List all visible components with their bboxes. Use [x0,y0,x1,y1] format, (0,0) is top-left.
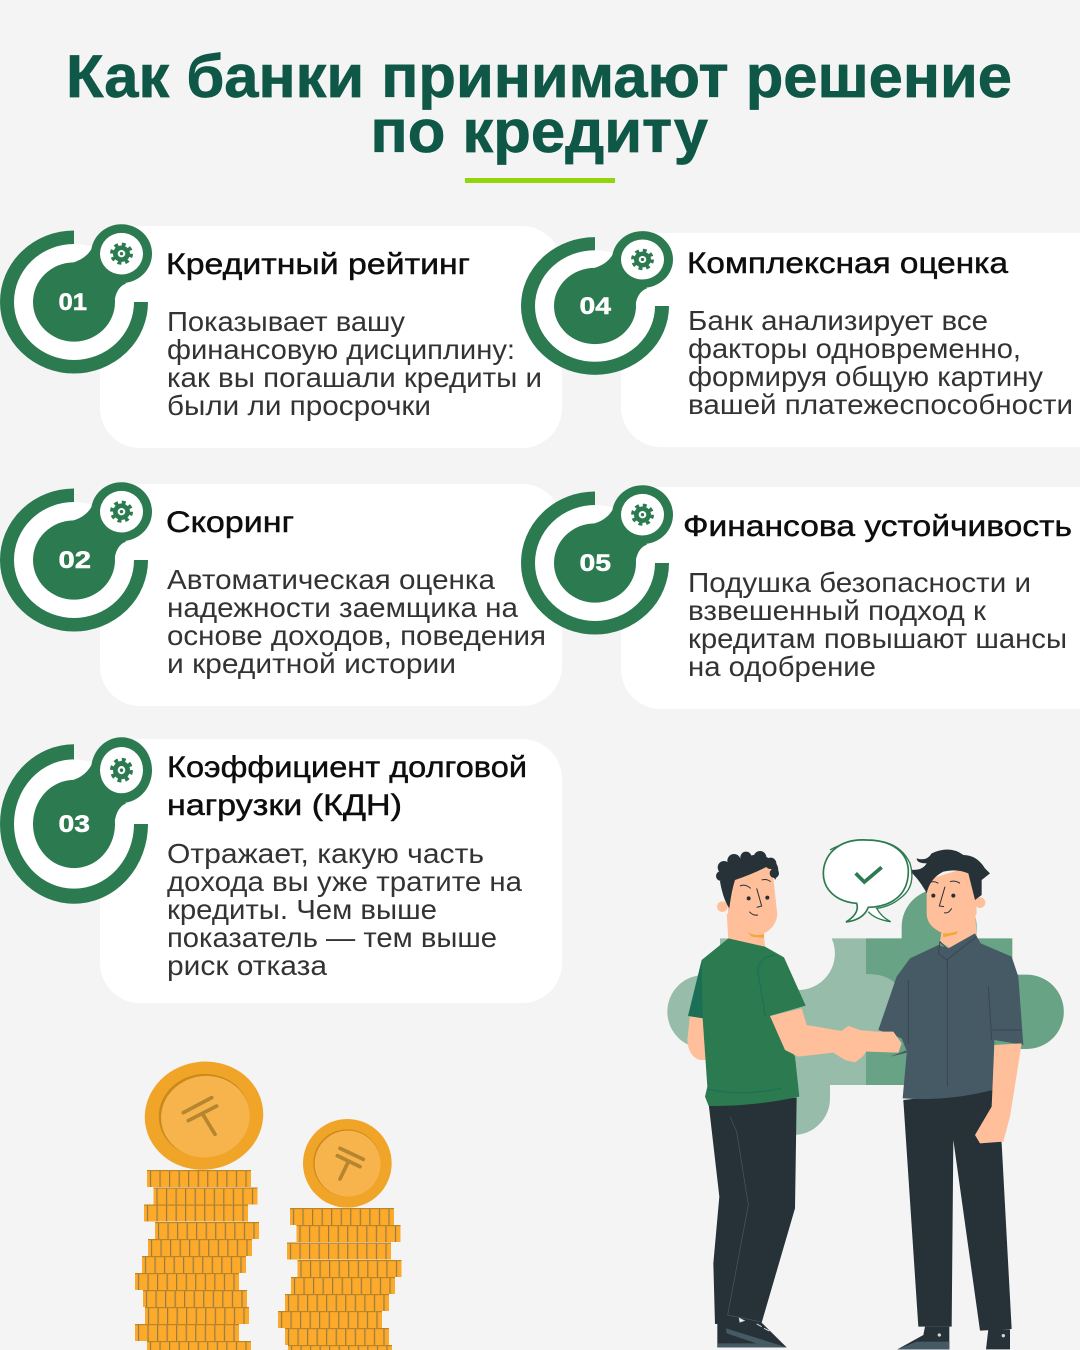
panel: card 02 scoring [7,482,562,706]
text block: overall assessment [688,305,1073,420]
icon: badge 01: 01 [58,289,87,316]
coins: right stack [278,1208,402,1350]
title: по кредиту [370,98,709,165]
text block: debt load ratio [167,838,522,981]
heading: debt load ratio: нагрузки (КДН) [167,789,402,822]
title: Как банки принимают решение [66,43,1012,110]
heading: debt load ratio [167,751,527,822]
text block: credit rating: Показывает вашу [167,306,405,337]
man right [858,850,1023,1349]
coins: left stack [135,1170,259,1350]
icon: badge 04 [528,231,673,368]
icon: badge 04: 04 [580,293,612,320]
text block: scoring: Автоматическая оценка [167,564,495,595]
illustration: two men shaking hands [667,840,1064,1349]
panel: card 05 financial stability [528,485,1080,709]
man left [687,851,867,1347]
text block: financial stability: взвешенный подход к [688,595,987,626]
text block: debt load ratio: Отражает, какую часть [167,838,484,869]
icon: large tenge coin [138,1054,270,1177]
text block: financial stability: кредитам повышают шансы [688,623,1067,654]
text block: credit rating: как вы погашали кредиты и [167,362,542,393]
icon: badge 03: 03 [58,811,90,838]
text block: debt load ratio: показатель — тем выше [167,922,497,953]
text block: credit rating: были ли просрочки [167,390,431,421]
text block: credit rating: финансовую дисциплину: [167,334,515,365]
text block: debt load ratio: дохода вы уже тратите на [167,866,522,897]
title [66,43,1012,165]
text block: financial stability: на одобрение [688,651,876,682]
speech bubble with check mark [823,840,912,922]
text block: scoring: надежности заемщика на [167,592,518,623]
panel: card 03 debt load ratio [7,737,562,1003]
title underline [465,178,615,183]
heading: scoring: Скоринг [166,506,294,539]
heading: debt load ratio: Коэффициент долговой [167,751,527,784]
icon: badge 05: 05 [580,550,611,577]
icon: badge 02: 02 [58,547,91,574]
panel: card 01 credit rating [7,224,562,448]
text block: credit rating [167,306,542,421]
icon: badge 05 [528,485,673,628]
heading: credit rating: Кредитный рейтинг [166,248,470,281]
icon: badge 02 [7,482,152,625]
text block: financial stability: Подушка безопасности и [688,567,1031,598]
text block: overall assessment: формируя общую картину [688,361,1043,392]
icon: badge 03 [7,737,152,896]
text block: financial stability [688,567,1067,682]
icon: badge 01 [7,224,152,367]
text block: scoring: основе доходов, поведения [167,620,546,651]
puzzle pieces [667,889,1064,1135]
heading: overall assessment: Комплексная оценка [687,247,1008,280]
icon: small tenge coin [303,1119,392,1208]
text block: debt load ratio: кредиты. Чем выше [167,894,437,925]
text block: scoring [167,564,546,679]
heading: financial stability: Финансова устойчивость [683,510,1072,543]
text block: overall assessment: вашей платежеспособности [688,389,1073,420]
text block: scoring: и кредитной истории [167,648,456,679]
text block: overall assessment: факторы одновременно, [688,333,1021,364]
text block: debt load ratio: риск отказа [167,950,327,981]
text block: overall assessment: Банк анализирует все [688,305,988,336]
panel: card 04 overall assessment [528,231,1080,447]
